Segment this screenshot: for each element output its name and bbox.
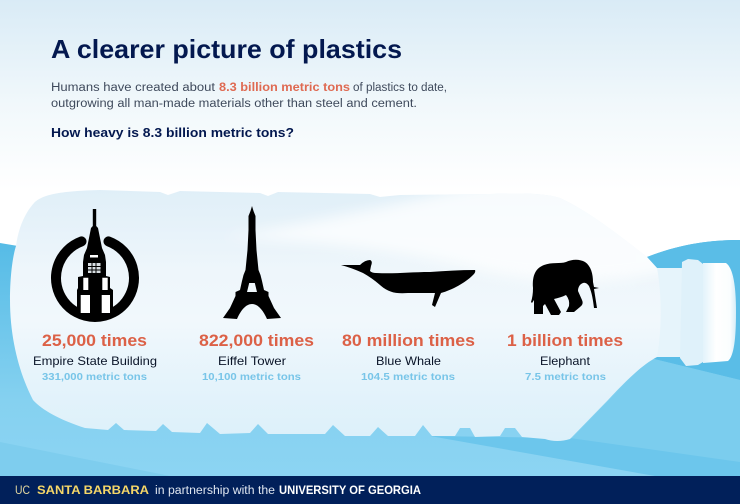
bottle shoulder highlight — [263, 194, 657, 278]
water background — [0, 240, 740, 476]
bottle neck — [657, 268, 682, 357]
footer bar — [0, 476, 740, 504]
name: Blue Whale — [376, 354, 441, 368]
intro text block: of plastics to date, — [353, 82, 447, 94]
bottle body — [10, 190, 682, 441]
multiplier: 822,000 times — [199, 331, 314, 350]
item: Blue Whale — [341, 260, 475, 383]
name: Elephant — [540, 354, 591, 368]
intro text block: outgrowing all man-made materials other than steel and cement. — [51, 98, 417, 110]
intro text block: 8.3 billion metric tons — [219, 82, 350, 94]
footer credits: UC — [15, 485, 30, 497]
intro text block — [51, 82, 447, 110]
question heading: How heavy is 8.3 billion metric tons? — [51, 126, 294, 140]
multiplier: 25,000 times — [42, 331, 147, 350]
title: A clearer picture of plastics — [51, 34, 402, 64]
item: Elephant — [507, 260, 623, 383]
bottle cap — [703, 263, 736, 363]
bottle ring — [680, 259, 703, 366]
name: Eiffel Tower — [218, 354, 286, 368]
background sky — [0, 0, 740, 190]
icon: Eiffel Tower — [223, 206, 281, 319]
plastic bottle — [10, 170, 736, 441]
footer credits: UNIVERSITY OF GEORGIA — [279, 485, 421, 497]
footer credits: SANTA BARBARA — [37, 485, 149, 497]
footer credits — [15, 485, 421, 497]
multiplier: 1 billion times — [507, 331, 623, 350]
intro text block: Humans have created about — [51, 82, 216, 94]
icon: blue whale — [341, 260, 475, 307]
weight: 104.5 metric tons — [361, 371, 455, 383]
weight: 7.5 metric tons — [525, 371, 606, 383]
footer credits: in partnership with the — [155, 485, 275, 497]
icon: Empire State Building — [56, 209, 134, 318]
multiplier: 80 million times — [342, 331, 475, 350]
weight: 10,100 metric tons — [202, 371, 301, 383]
name: Empire State Building — [33, 354, 157, 368]
icon: elephant — [531, 260, 599, 315]
item: Eiffel Tower — [199, 206, 314, 383]
item: Empire State Building — [33, 209, 157, 383]
weight: 331,000 metric tons — [42, 371, 147, 383]
